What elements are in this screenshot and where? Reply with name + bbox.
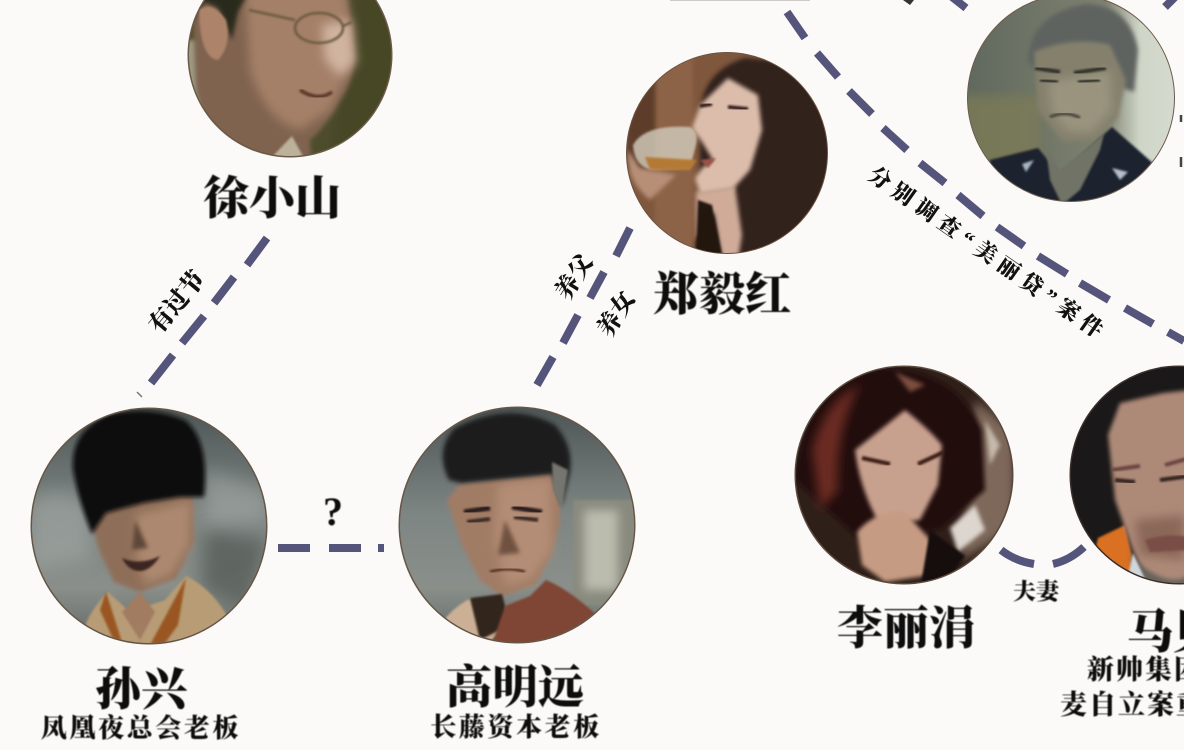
connector: 美丽贷 investigation [787,12,1184,341]
subtitle: 凤凰夜总会老板: 凤凰夜总会老板 [41,713,241,743]
portrait: 李丽涓 [790,360,1020,590]
label: 养父: 养父 [550,248,600,305]
subtitle: 长藤资本老板: 长藤资本老板 [430,712,602,742]
portrait: 高明远 [398,406,636,644]
portrait: 马 [1070,366,1184,584]
connector: 孙兴 to 高明远 [278,544,384,552]
name: 高明远: 高明远 [446,662,584,713]
label: 夫妻: 夫妻 [1013,578,1061,604]
connector: 郑毅红 to 高明远 [537,228,630,385]
name: 孙兴: 孙兴 [95,664,191,715]
connector: 夫妻 arcs [1001,547,1084,564]
connector: top edge fragments [670,0,1181,167]
label: ?: ? [323,489,343,534]
label: 有过节: 有过节 [143,265,211,338]
portrait: 徐小山 [188,0,392,158]
connector: 徐小山 to 孙兴 [137,238,267,397]
name: 李丽涓: 李丽涓 [837,603,975,654]
name: 郑毅红: 郑毅红 [653,269,791,320]
label: 分别调查“美丽贷”案件: 分别调查“美丽贷”案件 [864,162,1113,346]
name: 徐小山: 徐小山 [203,173,341,224]
label: 养女: 养女 [592,285,642,342]
portrait: 孙兴 [30,408,268,644]
portrait: 郑毅红 [620,50,835,260]
portrait: police officer [967,0,1175,202]
